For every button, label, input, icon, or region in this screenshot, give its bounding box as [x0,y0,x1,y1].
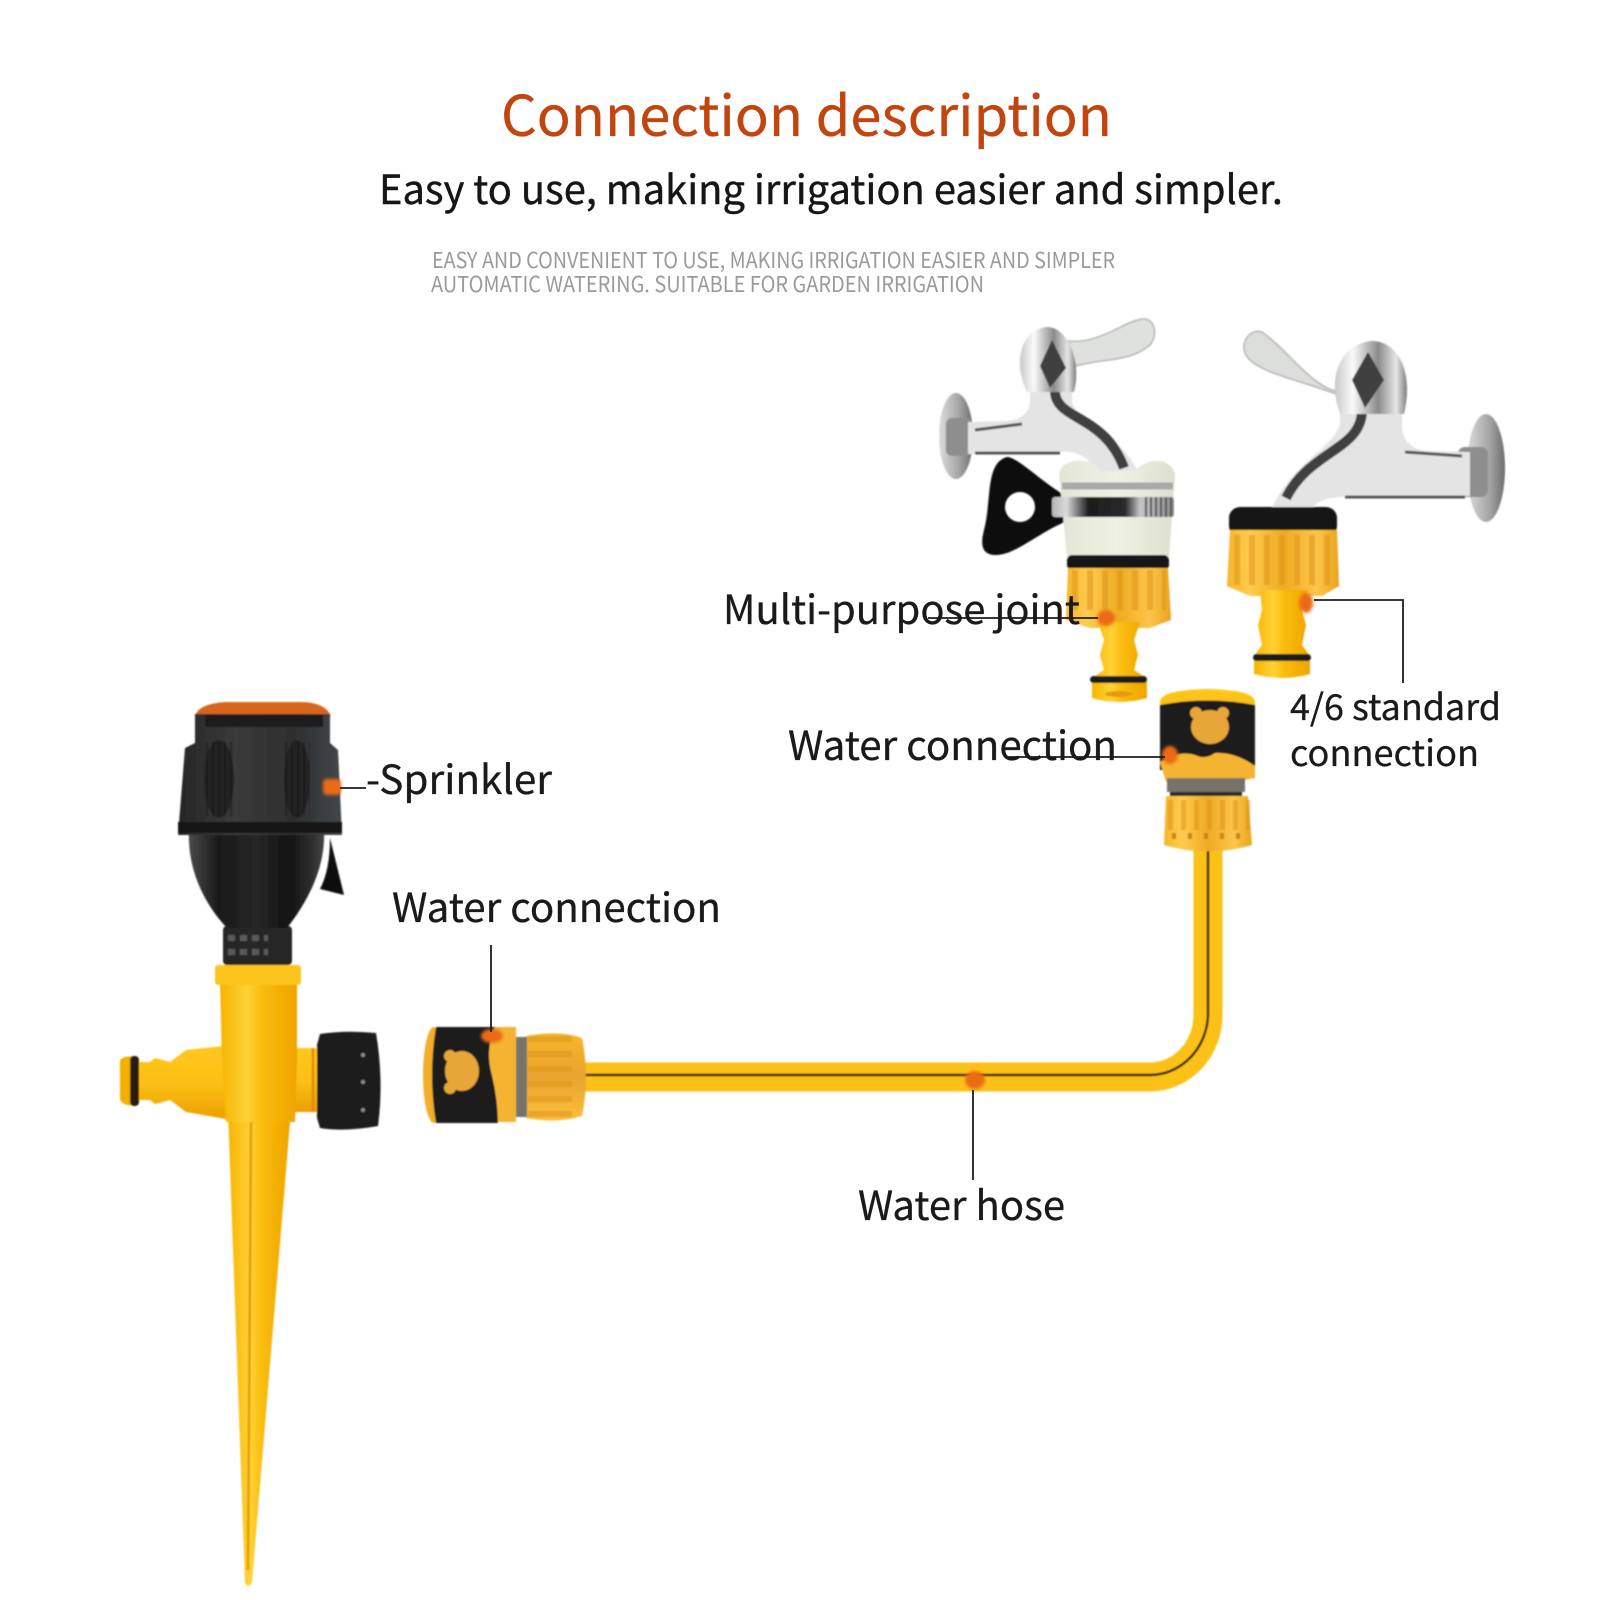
spout dark stripe [1055,392,1124,468]
stem [220,983,297,1122]
lever handle [1244,331,1340,394]
hex fitting [1458,447,1488,497]
spike [228,1110,291,1586]
grip ridges [206,742,310,816]
white clamp body [1059,461,1175,558]
collar [526,1033,586,1121]
black body [432,1027,498,1123]
threaded nut [1164,796,1252,852]
yellow wave band [1160,753,1255,784]
black ring [1067,555,1169,570]
collar ribs [528,1036,572,1118]
pipe shading [1345,452,1465,497]
nut ribs [1168,800,1250,830]
dark seal line [1170,792,1242,796]
threaded neck [223,926,292,965]
o-ring [1253,654,1311,661]
fin [320,838,344,895]
nipple opening [1105,691,1133,697]
label: standard connection: connection [1290,725,1479,777]
black nut [317,1032,381,1130]
icon: left faucet [939,319,1175,702]
yellow nut [1066,568,1171,628]
nut ribs [1072,570,1166,610]
black wing key [982,457,1065,555]
icon: right faucet [1227,331,1505,678]
stem collar [215,965,301,985]
title: Connection description [501,72,1112,153]
nut notches [1172,833,1246,839]
grey seal [505,1037,527,1117]
head reflection [1040,340,1066,388]
subtitle: Easy to use, making irrigation easier and simpler. [379,158,1283,216]
valve head [1020,327,1076,392]
o-ring [1090,676,1147,683]
threaded arm [290,1048,326,1112]
grip left [204,740,234,818]
quick-connect stub [120,1045,232,1120]
icon: lower water connector [423,1027,586,1123]
nipple [1254,590,1310,678]
nipple [1092,622,1147,702]
head reflection [1352,352,1384,408]
wall flange [1467,414,1505,522]
grey seal [1167,778,1245,792]
label: sprinkler: -Sprinkler [366,748,552,806]
black body [1160,700,1255,770]
dark band on head [205,715,323,727]
spike seam [248,1120,251,1570]
bear badge [444,1050,479,1094]
orange top cap [195,702,331,716]
valve head [1335,341,1407,414]
lever handle [1068,319,1155,366]
clamp screw band [1052,497,1174,517]
pipe and spout body [968,388,1137,476]
clamp strap [1062,482,1173,490]
nut ribs [1234,535,1334,585]
nut detail dots [361,1053,365,1112]
spout dark stripe [1286,410,1362,498]
leader lines [340,600,1403,1180]
label: standard connection [1290,679,1501,777]
water hose [580,850,1208,1077]
sprinkler head [178,714,342,835]
label: water hose: Water hose [858,1174,1065,1232]
small caption: EASY AND CONVENIENT TO USE, MAKING IRRIGATION EASIER AND SIMPLER [432,243,1115,275]
bear badge [1190,707,1229,744]
yellow rim [423,1027,445,1123]
black ring [1229,507,1337,537]
clamp teeth [1145,497,1172,517]
label: standard connection: 4/6 standard [1290,679,1501,731]
yellow wave band [489,1027,516,1122]
label: upper water connection: Water connection [788,714,1117,772]
lower bulb [189,830,324,928]
icon: sprinkler on spike [120,702,381,1586]
pipe shading [975,424,1060,453]
hex fitting [946,418,972,456]
label: lower water connection: Water connection [392,876,721,934]
icon: upper water connector [1160,689,1255,852]
small caption [431,243,1115,299]
orange marker dots [323,593,1313,1089]
neck ridges [228,938,268,952]
grip right [284,740,310,818]
label: multi-purpose joint: Multi-purpose joint [723,578,1080,636]
pipe and spout body [1270,408,1470,512]
wall flange [939,393,973,479]
yellow nut [1227,530,1339,596]
small caption: AUTOMATIC WATERING. SUITABLE FOR GARDEN IRRIGATION [431,267,984,299]
head base rim [178,822,342,833]
arm thread [313,1048,320,1112]
connector top rim [1160,689,1255,716]
